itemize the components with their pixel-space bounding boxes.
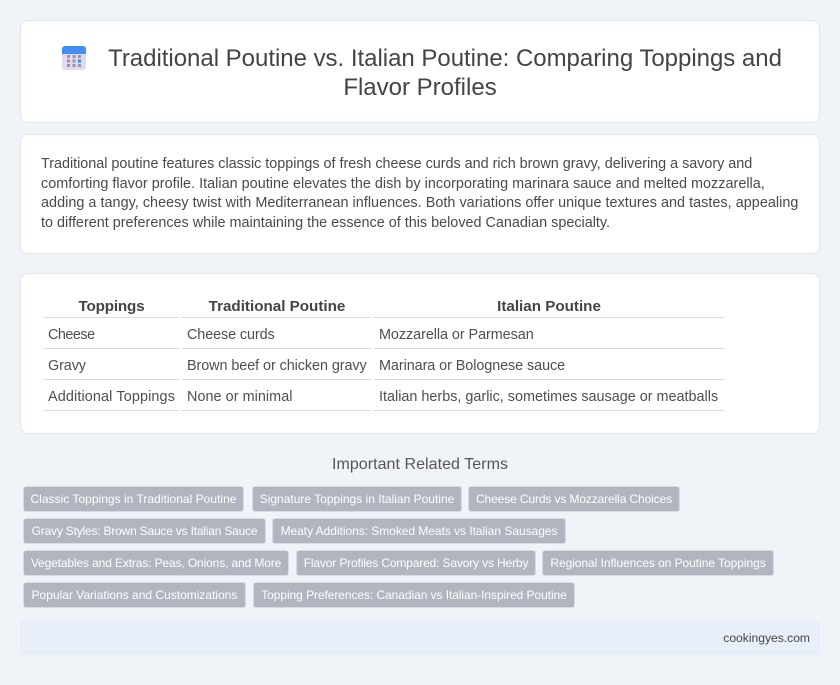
- title: Flavor Profiles: [343, 74, 497, 101]
- panel: title card: [20, 20, 820, 123]
- related term tags: Topping Preferences: Canadian vs Italian-Inspired Poutine: [261, 588, 567, 602]
- related term tags: Cheese Curds vs Mozzarella Choices: [476, 492, 672, 506]
- row: additional toppings: Additional Toppings: [48, 389, 175, 405]
- table header: Toppings: [78, 298, 144, 315]
- panel: comparison table: Italian Poutine: [497, 298, 601, 315]
- tag row 4: Popular Variations and Customizations: [32, 588, 237, 602]
- related term tags: Regional Influences on Poutine Toppings: [550, 556, 766, 570]
- panel: comparison table: None or minimal: [187, 389, 293, 405]
- tag row 1: [23, 486, 244, 512]
- panel: comparison table: Cheese curds: [187, 327, 275, 343]
- footer source: cookingyes.com: [723, 631, 810, 645]
- title: Traditional Poutine vs. Italian Poutine: Comparing Toppings and: [108, 45, 782, 72]
- tag row 2: [23, 518, 266, 544]
- panel: comparison table: Marinara or Bolognese sauce: [379, 358, 565, 374]
- title: [108, 45, 782, 101]
- tag row 3: Vegetables and Extras: Peas, Onions, and More: [31, 556, 281, 570]
- intro text: Traditional poutine features classic toppings of fresh cheese curds and rich brown gravy, delivering a savory and: [41, 156, 752, 172]
- related term tags: Flavor Profiles Compared: Savory vs Herby: [304, 556, 528, 570]
- panel: comparison table: Traditional Poutine: [209, 298, 345, 315]
- intro text: comforting flavor profile. Italian poutine elevates the dish by incorporating marinara sauce and melted mozzarella,: [41, 176, 765, 192]
- tag row 4: [23, 582, 246, 608]
- heading: related terms: Important Related Terms: [332, 456, 508, 473]
- panel: comparison table: Italian herbs, garlic, sometimes sausage or meatballs: [379, 389, 718, 405]
- intro text: adding a tangy, cheesy twist with Mediterranean influences. Both variations offer unique textures and tastes, appealing: [41, 195, 798, 211]
- related term tags: [23, 486, 774, 608]
- intro text: to different preferences while maintaining the essence of this beloved Canadian specialty.: [41, 214, 610, 230]
- tag row 1: Classic Toppings in Traditional Poutine: [30, 492, 236, 506]
- panel: comparison table: Mozzarella or Parmesan: [379, 327, 534, 343]
- panel: comparison table: [20, 273, 820, 434]
- footer bar: [20, 621, 820, 655]
- tag row 2: Gravy Styles: Brown Sauce vs Italian Sauce: [32, 524, 257, 538]
- intro text: [41, 156, 798, 230]
- related term tags: Signature Toppings in Italian Poutine: [260, 492, 454, 506]
- row: gravy: Gravy: [48, 358, 86, 374]
- tag row 3: [23, 550, 289, 576]
- panel: introduction: [20, 134, 820, 254]
- panel: comparison table: Brown beef or chicken gravy: [187, 358, 367, 374]
- row: cheese: Cheese: [48, 327, 95, 343]
- icon: calendar: [62, 46, 86, 70]
- related term tags: Meaty Additions: Smoked Meats vs Italian Sausages: [281, 524, 557, 538]
